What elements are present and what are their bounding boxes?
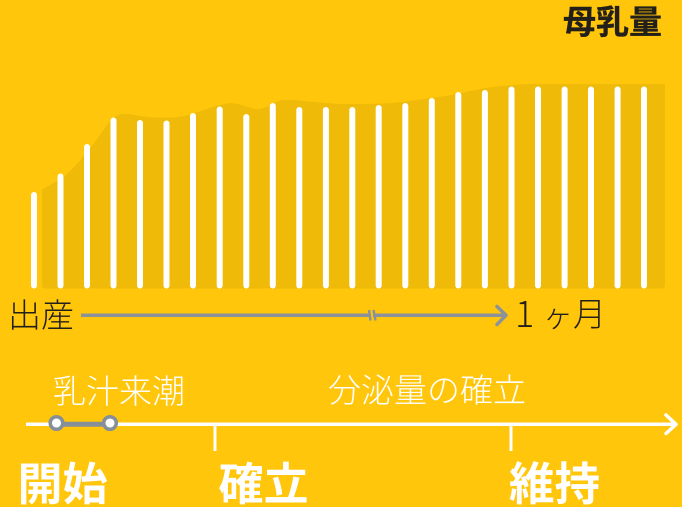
- heading: milk volume: 母乳量: [563, 4, 662, 40]
- label: one month: 1: [515, 286, 534, 338]
- bars: daily milk volume: [34, 90, 644, 286]
- label: one month: ヶ: [543, 301, 573, 334]
- area: volume trend: [42, 84, 665, 288]
- lactogenesis stage marker: [50, 417, 116, 429]
- label: lactogenesis: 乳汁来潮: [53, 373, 185, 410]
- arrow: time axis with break mark: [81, 306, 506, 324]
- label: establishment of secretion volume: 分泌量の確立: [328, 372, 526, 409]
- chart: milk volume by day: [34, 84, 665, 288]
- timeline arrow: [26, 415, 676, 451]
- label: one month: [515, 286, 606, 338]
- label: one month: 月: [573, 296, 606, 333]
- label: birth: 出産: [8, 297, 74, 334]
